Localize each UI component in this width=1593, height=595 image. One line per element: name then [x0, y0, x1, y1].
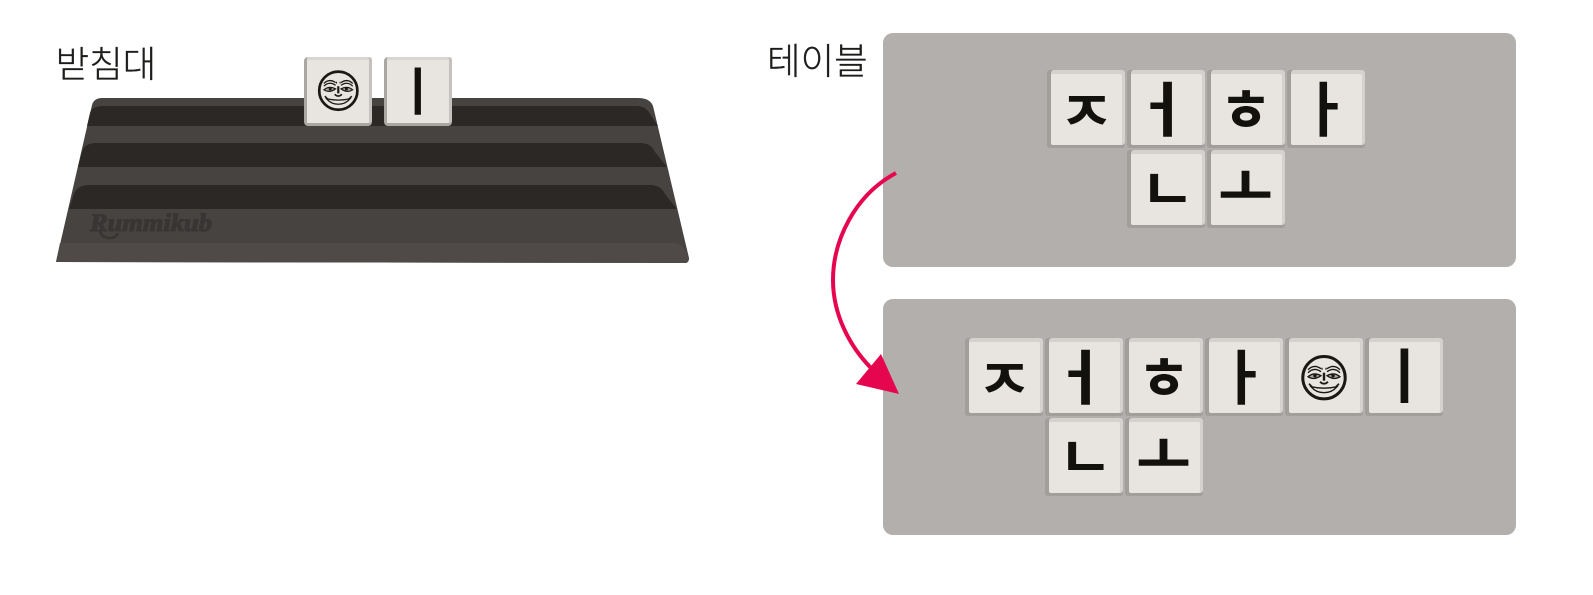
- rack tile: ㅣ: ㅣ: [396, 65, 439, 122]
- tile: ㅈ: ㅈ: [1059, 83, 1115, 143]
- tile: ㅓ: ㅓ: [1049, 347, 1110, 413]
- tile: ㅎ: ㅎ: [1219, 80, 1273, 144]
- tile: ㅗ: [1125, 418, 1203, 496]
- heading: 받침대: 받침대: [56, 44, 156, 85]
- tile: ㄴ: ㄴ: [1058, 427, 1113, 491]
- tile: ㅈ: [1047, 70, 1125, 148]
- tile: ㅎ: [1207, 70, 1285, 148]
- rack base strip: [56, 243, 689, 263]
- rack slot 3: [69, 185, 677, 209]
- tile: ㅗ: [1207, 150, 1285, 228]
- heading: 테이블: 테이블: [767, 41, 868, 82]
- panel: table before: [883, 33, 1516, 267]
- tile: ㅗ: ㅗ: [1136, 425, 1191, 489]
- tile: ㅣ: ㅣ: [1377, 345, 1431, 411]
- tile: ㅓ: ㅓ: [1131, 79, 1192, 145]
- tile: ㄴ: ㄴ: [1140, 159, 1195, 223]
- rack slot 1: [87, 106, 658, 126]
- panel: table after: [883, 299, 1516, 535]
- rack: [56, 98, 689, 263]
- arrow: move tiles down: [833, 173, 899, 394]
- tile: ㅓ: [1045, 338, 1123, 416]
- tile: ㅓ: [1127, 70, 1205, 148]
- tile: ㅎ: [1125, 338, 1203, 416]
- tile: ㅈ: [965, 338, 1043, 416]
- tile: ㅏ: [1205, 338, 1283, 416]
- tile: ㅈ: ㅈ: [977, 351, 1033, 411]
- tile: ㅏ: ㅏ: [1299, 79, 1351, 145]
- rack tile: ㅣ: [384, 57, 452, 126]
- rack logo: Rummikub: [89, 210, 212, 237]
- tile: joker: [1285, 338, 1363, 416]
- tile: ㅎ: ㅎ: [1137, 348, 1191, 412]
- tile: ㄴ: [1045, 418, 1123, 496]
- tile: ㄴ: [1127, 150, 1205, 228]
- rack slot 2: [78, 143, 667, 167]
- tile: ㅣ: [1365, 338, 1443, 416]
- tile: ㅗ: ㅗ: [1218, 157, 1273, 221]
- tile: ㅏ: ㅏ: [1217, 347, 1269, 413]
- rack tile: joker: [304, 57, 372, 126]
- tile: ㅏ: [1287, 70, 1365, 148]
